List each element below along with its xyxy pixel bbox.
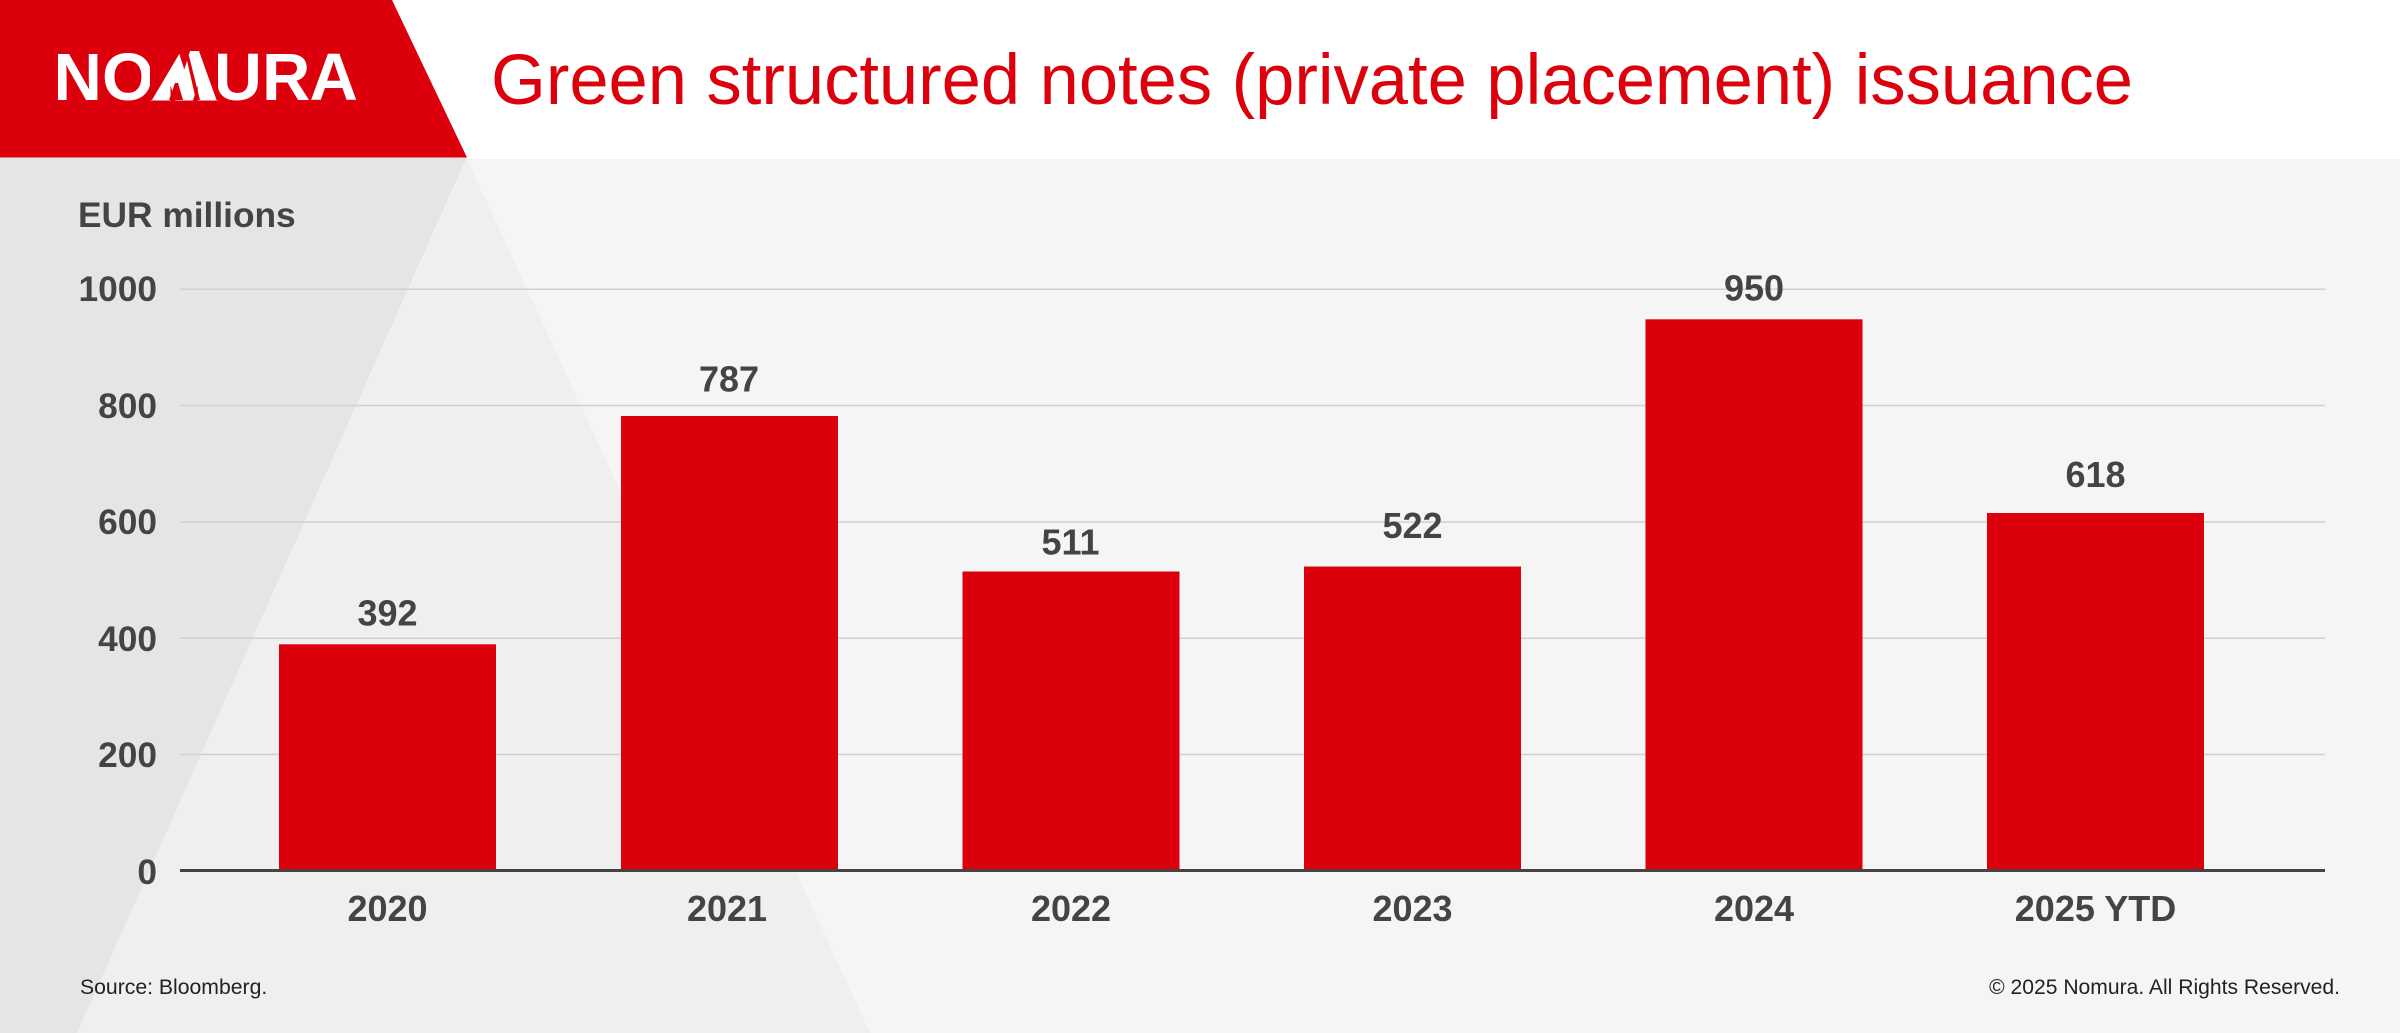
bar: 2022 [962,572,1180,870]
logo: Nomura: R [262,40,310,115]
value labels: 522 [1382,505,1443,546]
copyright note: © 2025 Nomura. All Rights Reserved. [1989,976,2340,999]
y-axis labels [78,270,157,892]
gridlines [180,289,2325,754]
bar: 2024 [1646,319,1862,870]
y-axis labels: 0 [137,853,157,892]
logo: Nomura: A [310,40,358,115]
bar chart [78,268,2325,929]
category labels: 2024 [1714,888,1794,929]
y-axis labels: 600 [98,503,157,542]
logo: Nomura: O [102,40,154,115]
logo: Nomura: N [54,40,102,115]
value labels: 511 [1041,522,1100,562]
value labels: 950 [1724,268,1784,309]
category labels: 2022 [1031,888,1111,929]
value labels: 618 [2065,454,2126,495]
title: Green structured notes (private placement) issuance [491,41,2133,120]
axis baseline [180,869,2325,872]
category labels: 2025 YTD [2015,888,2176,929]
bar: 2025 YTD [1987,513,2204,870]
y-axis labels: 200 [98,736,157,775]
category labels: 2023 [1372,888,1453,929]
logo: Nomura: U [214,40,262,115]
category labels: 2020 [347,888,428,929]
value labels: 392 [357,593,418,634]
value labels: 787 [699,359,759,400]
y-axis labels: 800 [98,387,157,426]
bar: 2020 [279,644,496,870]
category labels: 2021 [687,888,767,929]
bars [279,319,2204,870]
bar: 2023 [1304,566,1521,870]
y-axis labels: 1000 [78,270,157,309]
logo: Nomura: M [150,27,218,118]
source note: Source: Bloomberg. [80,976,267,999]
logo: Nomura [58,51,356,100]
category labels [347,888,2176,929]
header logo panel [0,0,467,158]
y-axis labels: 400 [98,620,157,659]
bar: 2021 [621,416,838,870]
y-axis unit label: EUR millions [78,196,296,235]
value labels [357,268,2126,634]
